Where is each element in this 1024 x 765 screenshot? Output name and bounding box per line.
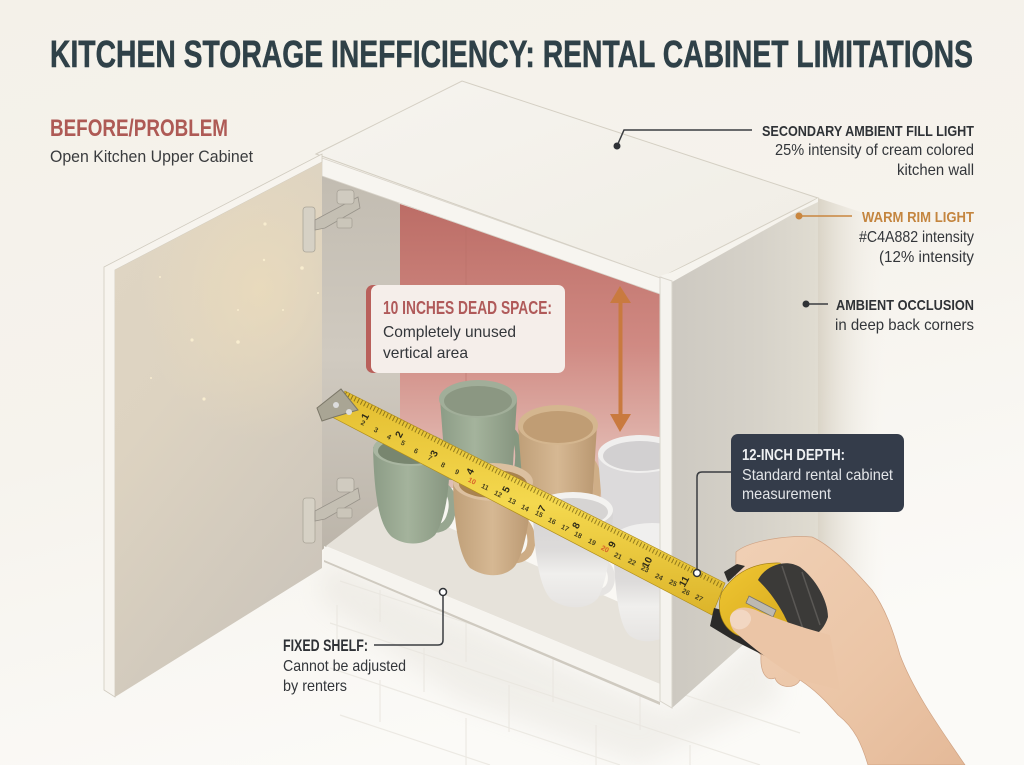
annotation: ambient occlusion [802,297,974,334]
tape minor numbers: 18 [573,531,583,541]
tape minor numbers: 20 [600,545,610,555]
tape minor numbers: 14 [520,504,530,514]
annotation: warm rim light: WARM RIM LIGHT [862,209,974,226]
tape minor numbers: 13 [507,497,517,507]
cabinet inner left wall [322,162,400,550]
callout: 10 inches dead space: 10 INCHES DEAD SPACE: [383,298,552,318]
tape lock button [746,596,776,617]
tape minor numbers: 3 [372,427,379,435]
tape minor numbers: 17 [560,524,570,534]
annotation: warm rim light: #C4A882 intensity [859,229,974,246]
callout: fixed shelf: by renters [283,678,347,695]
annotation: warm rim light: (12% intensity [879,249,974,266]
tape major numbers: 9 [607,539,619,550]
hinge: lower [303,478,360,543]
tape minor numbers: 12 [493,490,503,500]
open cabinet door [104,154,322,698]
tape minor numbers: 2 [359,420,366,428]
tape minor numbers: 24 [654,573,664,583]
tape major numbers: 4 [465,466,477,477]
mug: back white [598,435,660,530]
tape minor numbers: 6 [412,448,419,456]
tape minor numbers: 23 [640,565,650,575]
tape major numbers [360,411,692,589]
tape minor numbers: 10 [467,477,477,487]
forearm and hand [735,537,965,765]
tape major numbers: 7 [537,503,549,514]
tiled backsplash [320,562,800,765]
cabinet cast shadow [818,198,885,605]
tape minor numbers [359,420,704,604]
callout: 10 inches dead space: vertical area [383,345,468,362]
callout: 10 inches dead space: Completely unused [383,324,516,341]
callout: 12-inch depth: Standard rental cabinet [742,467,893,484]
tape minor numbers: 16 [547,517,557,527]
mug: back tan [518,405,598,505]
before/problem heading: BEFORE/PROBLEM [50,115,228,142]
tape end hook [317,389,358,421]
measuring tape [317,389,725,615]
tape major numbers: 3 [429,448,441,459]
mug: back sage [439,380,519,480]
tape major numbers: 5 [501,484,513,495]
callout: 12-inch depth: measurement [742,486,831,503]
tape minor numbers: 4 [385,434,392,442]
tape minor numbers: 25 [668,579,678,589]
callout: 12-inch depth [694,434,904,576]
tape case rubber grip [758,563,828,637]
tape tick marks [345,394,722,586]
cabinet back wall: highlighted dead space [400,204,660,520]
cabinet [104,81,818,708]
tape major numbers: 2 [394,429,406,440]
fixed shelf [324,500,660,705]
tape minor numbers: 7 [426,455,433,463]
tape minor numbers: 5 [399,440,406,448]
tape minor numbers: 21 [613,552,623,562]
annotation: secondary ambient fill light: 25% intensity of cream colored [775,142,974,159]
tape major numbers: 11 [677,574,692,589]
callout: fixed shelf: Cannot be adjusted [283,658,406,675]
annotation: ambient occlusion: AMBIENT OCCLUSION [836,297,974,314]
before/problem heading [50,115,253,166]
callout: 12-inch depth: 12-INCH DEPTH: [742,447,845,464]
tape major numbers: 1 [360,411,372,422]
cabinet right side panel [660,198,818,708]
annotation: secondary ambient fill light: kitchen wall [897,162,974,179]
tape minor numbers: 22 [627,558,637,568]
tape minor numbers: 19 [587,538,597,548]
tape minor numbers: 9 [453,469,460,477]
cabinet top panel [316,81,818,294]
tape major numbers: 8 [571,520,583,531]
tape minor numbers: 8 [439,462,446,470]
thumb [730,607,840,690]
mugs [373,380,660,640]
annotation: secondary ambient fill light: SECONDARY AMBIENT FILL LIGHT [762,123,974,140]
callout: fixed shelf [283,588,446,695]
tape major numbers: 10 [640,555,655,570]
mug: front white [533,492,613,607]
mug: front right white [614,523,660,640]
callout: fixed shelf: FIXED SHELF: [283,636,368,655]
mug: front tan [453,463,533,575]
tape minor numbers: 15 [534,510,544,520]
annotation: warm rim light [796,209,974,266]
annotation: ambient occlusion: in deep back corners [835,317,974,334]
tape case base [710,608,798,667]
hand holding tape measure [710,537,965,765]
tape case yellow body [719,563,812,638]
mug: front sage [373,432,453,544]
tape minor numbers: 11 [480,483,490,493]
tape minor numbers: 27 [694,594,704,604]
tape minor numbers: 26 [681,588,691,598]
tape blade [332,391,725,615]
hinge: upper [303,190,360,252]
before/problem heading: Open Kitchen Upper Cabinet [50,147,253,166]
dead space double arrow [610,286,631,432]
callout: 10 inches dead space [366,285,565,373]
annotation: secondary ambient fill light [614,123,974,179]
